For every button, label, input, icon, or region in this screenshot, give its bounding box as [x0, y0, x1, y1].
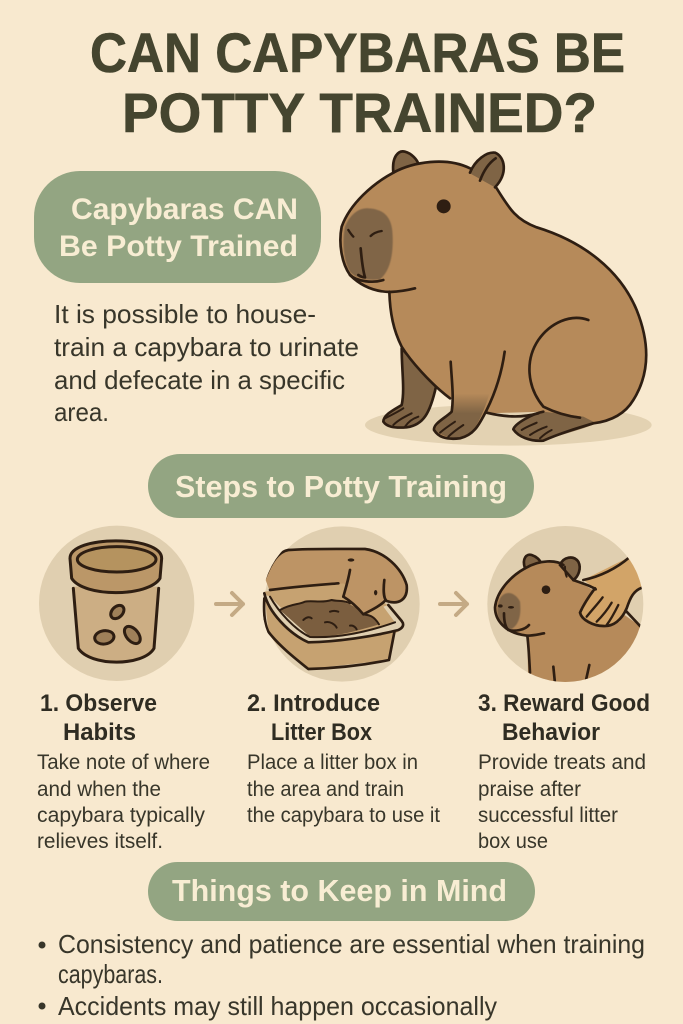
step 2 text: the area and train — [247, 778, 404, 801]
panel: capybaras can be potty trained: Be Potty Trained — [59, 230, 298, 263]
icon: cup with droppings — [39, 526, 194, 681]
step 3 text — [478, 690, 650, 853]
text block: bullet list: capybaras. — [58, 959, 163, 989]
step 2 text: 2. Introduce — [247, 690, 380, 717]
step 1 text: Take note of where — [37, 751, 210, 774]
text block: intro: It is possible to house- — [54, 299, 316, 329]
title: CAN CAPYBARAS BE — [90, 21, 625, 84]
step 2 text: Place a litter box in — [247, 751, 418, 774]
text block: intro: and defecate in a specific — [54, 365, 345, 395]
step 1 text: and when the — [37, 778, 161, 801]
panel: capybaras can be potty trained — [34, 171, 321, 283]
title: POTTY TRAINED? — [122, 81, 597, 144]
panel: capybaras can be potty trained: Capybaras CAN — [71, 193, 298, 226]
step 3 text: Provide treats and — [478, 751, 646, 774]
heading: things to keep in mind — [148, 862, 535, 921]
step 3 text: box use — [478, 830, 548, 853]
arrow: step 1 to 2 — [216, 593, 243, 615]
title — [90, 21, 625, 144]
step 1 text: capybara typically — [37, 804, 205, 827]
text block: intro — [54, 299, 359, 427]
text block: intro: area. — [54, 397, 109, 427]
step 1 text: relieves itself. — [37, 830, 163, 853]
step 3 text: 3. Reward Good — [478, 690, 650, 717]
step 3 text: praise after — [478, 778, 581, 801]
icon: sitting capybara — [340, 151, 652, 446]
step 2 text: Litter Box — [271, 719, 373, 746]
step 3 text: Behavior — [502, 719, 600, 746]
heading: things to keep in mind: Things to Keep in Mind — [172, 873, 507, 908]
step 3 text: successful litter — [478, 804, 618, 827]
text block: bullet list: Consistency and patience are essential when training — [58, 929, 645, 959]
step 1 text: Habits — [63, 719, 136, 746]
arrow: step 2 to 3 — [440, 593, 467, 615]
step 1 text — [37, 690, 210, 853]
step 2 text: the capybara to use it — [247, 804, 440, 827]
text block: bullet list — [38, 929, 645, 1021]
text block: bullet list: Accidents may still happen occasionally — [58, 991, 497, 1021]
icon: hand petting capybara — [487, 526, 644, 682]
heading: steps to potty training: Steps to Potty Training — [175, 469, 507, 504]
step 2 text — [247, 690, 440, 827]
heading: steps to potty training — [148, 454, 534, 518]
text block: intro: train a capybara to urinate — [54, 332, 359, 362]
icon: capybara using litter box — [264, 526, 420, 682]
step 1 text: 1. Observe — [40, 690, 157, 717]
